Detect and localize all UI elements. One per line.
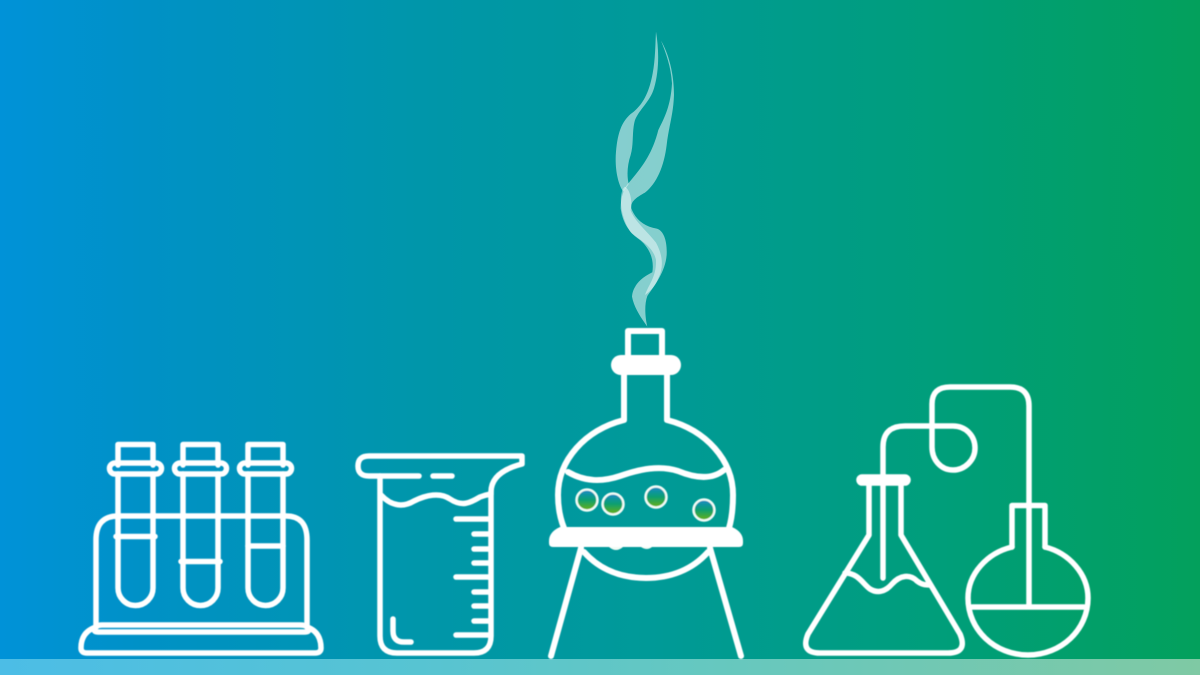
beaker rim and spout: [358, 456, 522, 492]
flask neck and bulb: [558, 374, 733, 528]
smoke right strand: [621, 41, 674, 327]
test tube 2: [174, 444, 226, 606]
smoke: [616, 32, 674, 327]
test tube rack: [81, 444, 321, 653]
conical flask body: [806, 483, 962, 653]
flask mouth: [628, 331, 662, 358]
round flask cap and neck: [1012, 506, 1045, 547]
stand legs: [551, 548, 741, 656]
test tube 1: [110, 444, 162, 606]
beaker liquid surface: [381, 494, 491, 505]
rack frame: [96, 516, 307, 627]
test tube 3: [240, 444, 292, 606]
beaker graduations: [456, 519, 490, 635]
flask liquid surface: [568, 468, 724, 480]
round flask bulb: [968, 547, 1088, 655]
beaker: [358, 456, 522, 653]
beaker highlight: [393, 619, 411, 642]
beaker body: [380, 476, 491, 653]
smoke bright inner strand: [621, 187, 662, 295]
flask collar: [611, 355, 681, 375]
bubble remnants under plate: [609, 547, 652, 550]
round bottom flask on stand: [549, 331, 743, 656]
conical flask lip: [859, 477, 908, 483]
bottom light band: [0, 659, 1200, 675]
distillation apparatus: [806, 387, 1088, 655]
bubbles: [576, 486, 714, 520]
stand plate: [549, 527, 743, 547]
conical flask liquid surface: [845, 573, 930, 591]
rack base: [94, 625, 309, 632]
round flask liquid line: [972, 604, 1084, 610]
connecting glass tube with loop: [883, 387, 1029, 605]
smoke left strand: [616, 32, 658, 192]
